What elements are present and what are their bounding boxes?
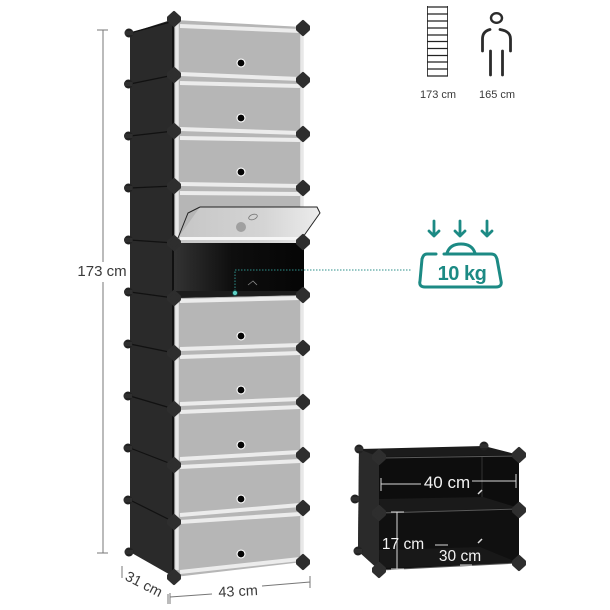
load arrows: [429, 221, 492, 236]
weight label: 10 kg: [438, 263, 486, 285]
open door flap: [178, 207, 320, 243]
icon: person comparison: 165 cm: [479, 89, 515, 101]
open compartment: [174, 243, 304, 298]
height dimension 173 cm: 173 cm: [77, 263, 127, 280]
shelf dimensions: 40 cm: [424, 473, 470, 492]
shelf dimensions: 30 cm: [439, 548, 481, 565]
small shelf unit: [350, 442, 524, 576]
side panel: [130, 19, 174, 577]
shelf dimensions: 17 cm: [382, 536, 424, 553]
dotted callout line: [232, 270, 412, 296]
shelf body: [358, 446, 519, 570]
door panels: [175, 20, 303, 577]
weight outline: [420, 244, 501, 287]
tall cabinet: [124, 12, 320, 584]
depth dimension 31 cm: 31 cm: [122, 569, 165, 601]
width dimension 43 cm: [170, 576, 310, 604]
icon: 10 kg weight: [420, 221, 501, 287]
icon: person comparison: [479, 13, 515, 101]
connectors: [124, 12, 308, 584]
shelf connectors: [350, 442, 524, 576]
icon: ladder comparison: 173 cm: [420, 89, 456, 101]
width dimension 43 cm: 43 cm: [218, 583, 258, 601]
icon: ladder comparison: [420, 6, 456, 101]
shelf dimensions: [381, 473, 516, 569]
height dimension 173 cm: [77, 30, 127, 553]
handle holes: [236, 58, 246, 558]
